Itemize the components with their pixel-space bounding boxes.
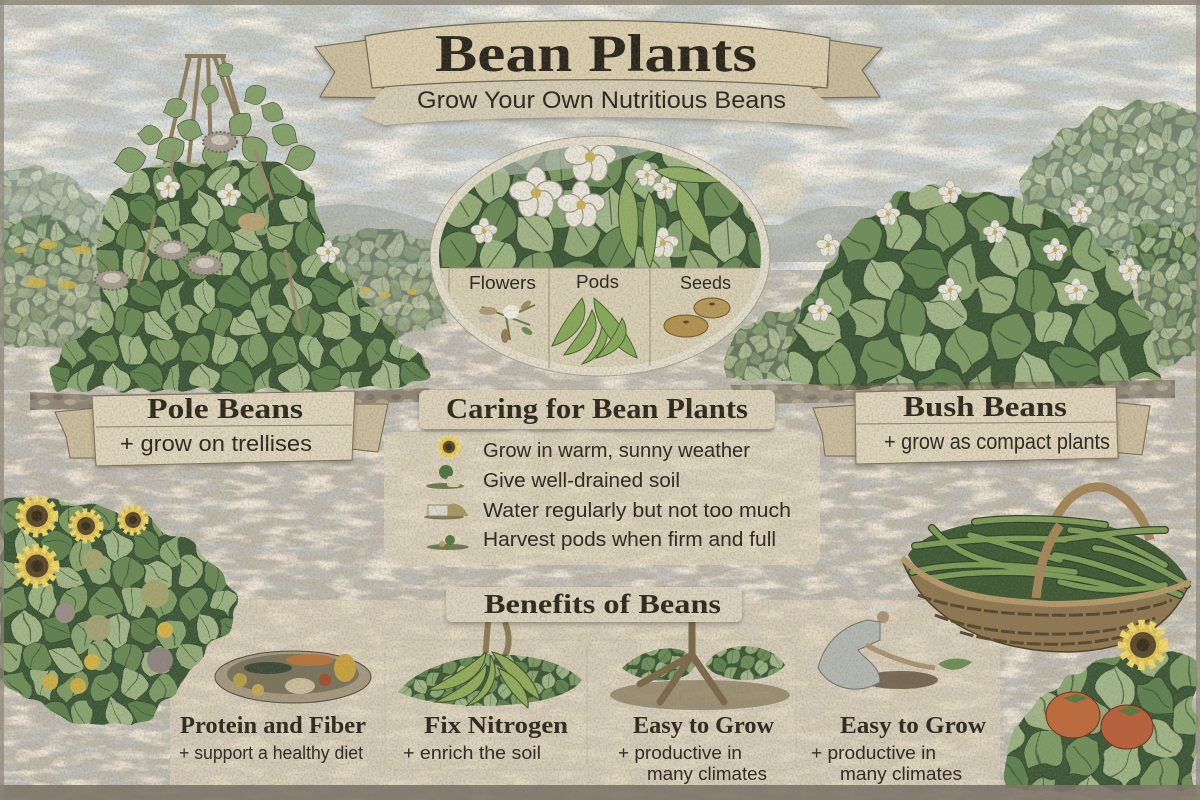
distant flower fields and shrubs (0, 100, 1200, 385)
sunflower patch (0, 498, 240, 725)
benefit 4 title: Easy to Grow (840, 713, 987, 739)
benefit 4 description line 2: many climates (840, 764, 962, 784)
care tip 3: Water regularly but not too much (483, 500, 791, 522)
description: + grow as compact plants (884, 429, 1110, 454)
icon: soil and plant (426, 465, 464, 489)
central circle: flowers, pods, seeds (430, 131, 770, 380)
benefits heading plaque (446, 587, 742, 622)
icon: harvest (427, 535, 469, 550)
beans in basket (912, 519, 1187, 595)
label: flowers: Flowers (469, 272, 536, 293)
icon: seeds (664, 298, 730, 337)
title banner (315, 20, 882, 128)
description: + grow on trellises (120, 431, 312, 456)
bush beans label (813, 387, 1150, 464)
care tip 4: Harvest pods when firm and full (483, 529, 776, 551)
benefit 3 title: Easy to Grow (633, 713, 775, 739)
pole bean plant with trellis (30, 56, 431, 410)
subtitle: Grow Your Own Nutritious Beans (417, 87, 786, 114)
benefit 3 description line 2: many climates (647, 764, 767, 784)
benefit 1 description: + support a healthy diet (179, 743, 363, 763)
icon: watering (424, 504, 468, 520)
upper vine leaves (112, 60, 319, 175)
benefit 2 title: Fix Nitrogen (424, 713, 568, 739)
icon: roots and soil (610, 622, 790, 710)
heading: Bush Beans (903, 391, 1067, 423)
heading: Caring for Bean Plants (446, 394, 748, 425)
basket of beans (902, 487, 1190, 652)
tomatoes and sunflower corner (1005, 624, 1195, 790)
icon: sunflower (439, 437, 459, 457)
icon: bean bundle (398, 622, 582, 708)
benefits panel (170, 587, 1000, 785)
benefit 4 description: + productive in (811, 743, 936, 763)
benefit 3 description: + productive in (618, 743, 742, 763)
bush bean plant (730, 180, 1175, 404)
care tip 1: Grow in warm, sunny weather (483, 440, 750, 462)
heading: Pole Beans (147, 393, 303, 425)
label: seeds: Seeds (680, 272, 731, 293)
title: Bean Plants (435, 25, 757, 83)
icon: flower sprig (478, 299, 535, 343)
care tip 2: Give well-drained soil (483, 470, 680, 492)
caring panel (384, 390, 820, 565)
benefit 1 title: Protein and Fiber (180, 713, 366, 739)
icon: pods (552, 298, 637, 364)
blossoms (470, 145, 679, 258)
hanging pods (618, 167, 722, 268)
label: pods: Pods (576, 271, 619, 292)
benefits heading: Benefits of Beans (484, 589, 721, 619)
icon: plate of food (215, 651, 371, 703)
benefit 2 description: + enrich the soil (403, 743, 541, 763)
pole beans label (55, 391, 388, 466)
icon: gardener (818, 603, 972, 689)
